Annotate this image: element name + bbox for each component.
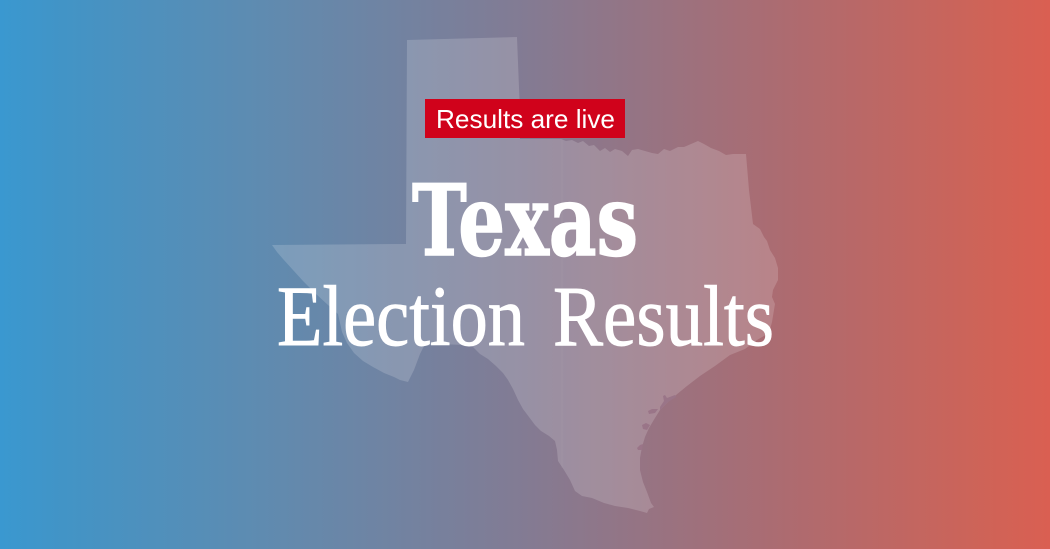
subtitle: Election Results bbox=[277, 268, 774, 364]
map: Texas silhouette bbox=[272, 37, 778, 513]
subtitle: Election Results: Results bbox=[553, 268, 774, 364]
map: coastal bays bbox=[637, 395, 676, 450]
badge: Results are live bbox=[425, 99, 625, 138]
title: Texas: Texas bbox=[412, 164, 638, 279]
subtitle: Election Results: Election bbox=[277, 268, 525, 364]
badge: Results are live: Results are live bbox=[436, 104, 615, 134]
